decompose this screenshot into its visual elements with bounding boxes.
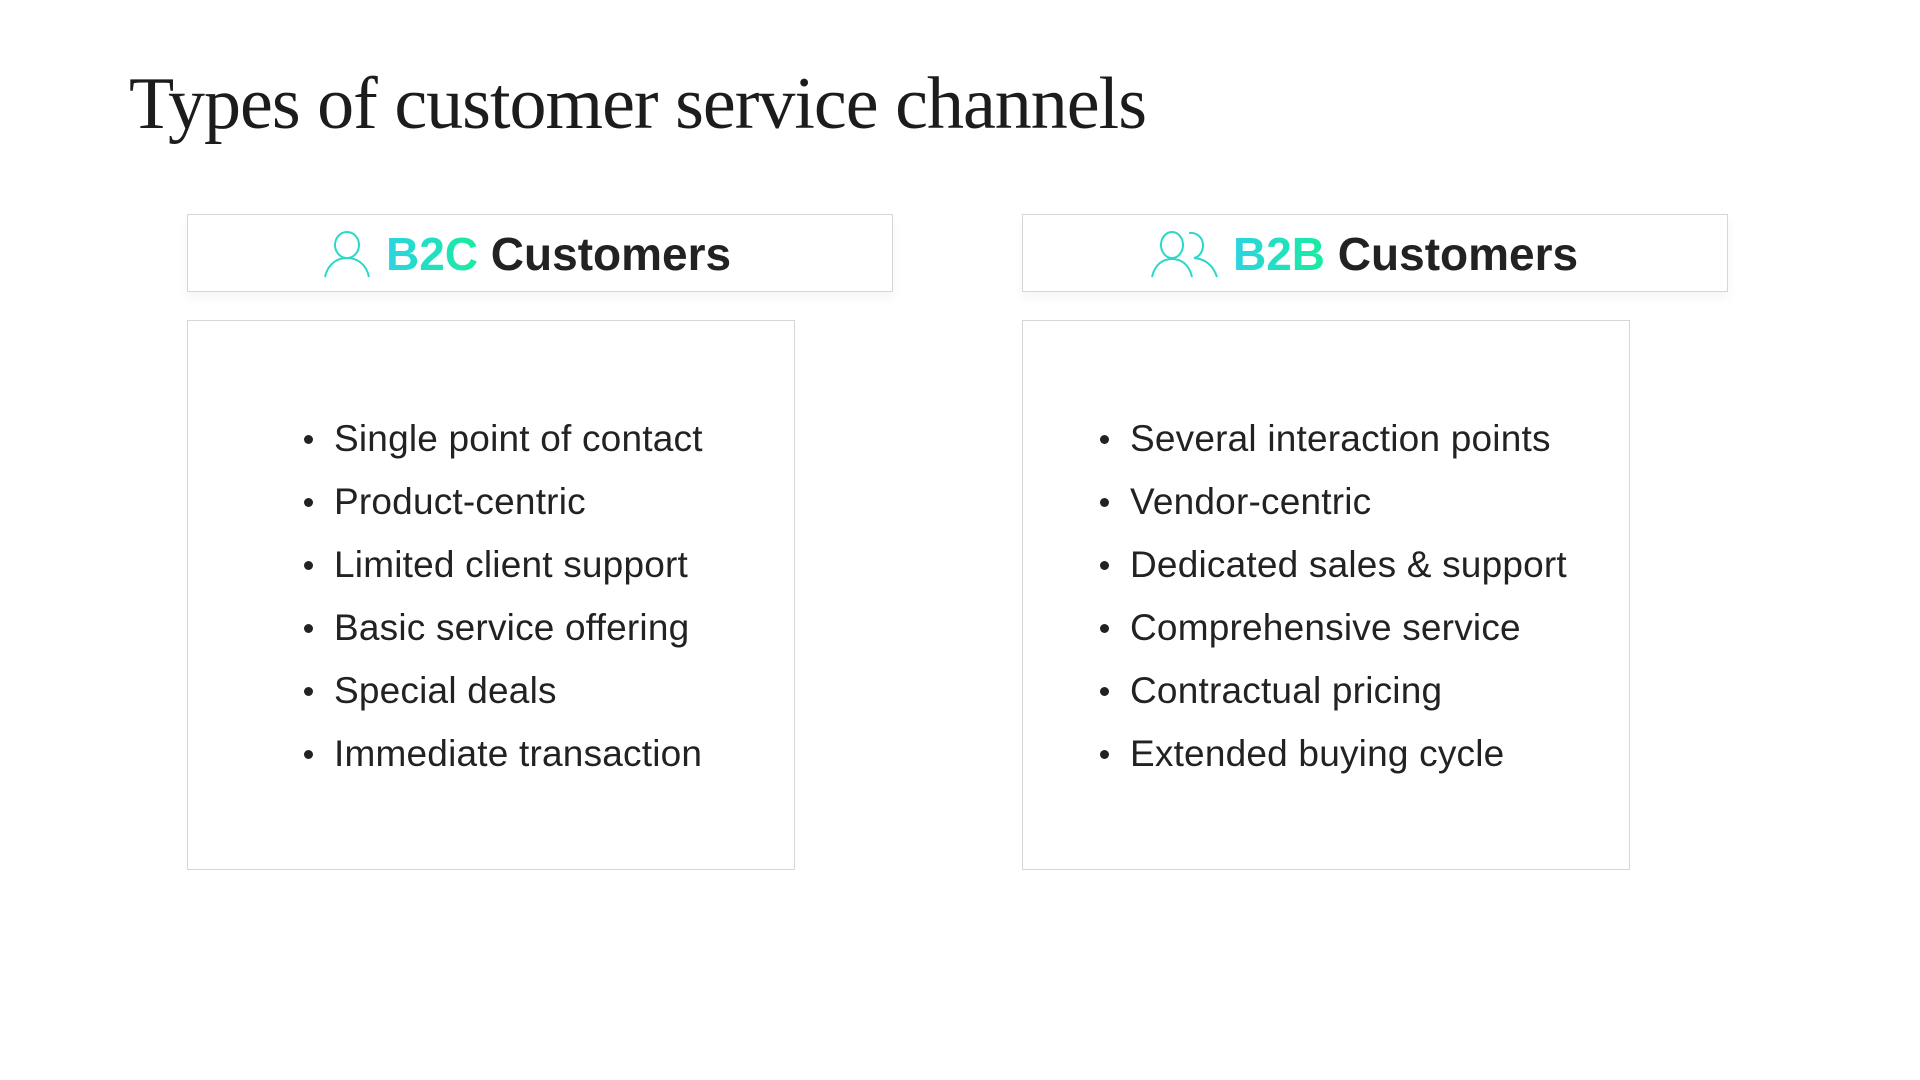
panel: B2C list: Limited client support [334,544,688,585]
panel: B2B list: Comprehensive service [1130,607,1521,648]
panel: B2C list [187,320,795,870]
panel: B2C list: Immediate transaction [334,733,702,774]
panel: B2C list: Product-centric [334,481,586,522]
panel: B2B list: Extended buying cycle [1130,733,1504,774]
panel header: B2C: B2C Customers [386,228,731,280]
panel: B2B list [1022,320,1630,870]
panel: B2B list: Contractual pricing [1130,670,1442,711]
panel: B2B list: Dedicated sales & support [1130,544,1567,585]
panel: B2C list: Single point of contact [334,418,703,459]
panel: B2B list: Several interaction points [1130,418,1551,459]
panel: B2B list: Vendor-centric [1130,481,1371,522]
icon: two people [1151,231,1218,278]
panel: B2C list: Special deals [334,670,557,711]
panel: B2C list: Basic service offering [334,607,689,648]
title: Types of customer service channels [129,63,1146,145]
icon: single person [324,231,370,278]
panel header: B2B [1022,214,1728,292]
panel header: B2B: B2B Customers [1233,228,1578,280]
panel header: B2C [187,214,893,292]
